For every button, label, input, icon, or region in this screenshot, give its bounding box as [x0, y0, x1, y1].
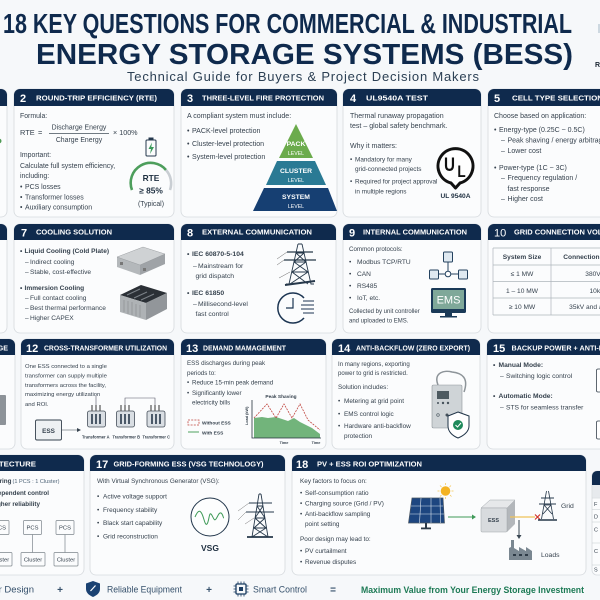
panel 5: cell type: [488, 89, 600, 217]
formula: Formula:: [20, 113, 47, 120]
text: important: •: [20, 194, 22, 202]
text: solution: Metering at grid point: [344, 398, 404, 405]
text: key factors: •: [300, 559, 302, 566]
panel 14: anti-backflow: [332, 339, 480, 449]
text: protocols: Modbus TCP/RTU: [357, 259, 411, 266]
text: key factors: •: [300, 500, 302, 508]
text: IEC standards: fast control: [196, 311, 229, 318]
pyramid: SYSTEM: [282, 194, 310, 201]
heading: ANTI-BACKFLOW (ZERO EXPORT): [356, 344, 471, 352]
text: cell types: Higher cost: [508, 196, 543, 203]
icon: UL mark: UL 9540A: [441, 193, 471, 200]
text: key factors: Self-consumption ratio: [305, 490, 369, 497]
text: capabilities: Grid reconstruction: [103, 534, 158, 540]
panel: table fragment: C: [594, 528, 598, 534]
footer banner: [0, 581, 585, 597]
footer: smart control: Smart Control: [253, 584, 307, 596]
text: cooling options: Best thermal performance: [30, 305, 106, 312]
text: modes: STS for seamless transfer: [506, 404, 584, 412]
text: description: •: [187, 380, 189, 386]
text: cell types: –: [501, 138, 505, 144]
text: solution: •: [338, 398, 340, 405]
text: description: periods to:: [187, 370, 216, 377]
heading: CROSS-TRANSFORMER UTILIZATION: [44, 344, 167, 352]
icon: battery: [146, 138, 156, 156]
text: cooling options: Liquid Cooling (Cold Plate): [24, 248, 109, 255]
text: cell types: Choose based on application:: [494, 113, 586, 120]
panel 3: fire protection: [181, 89, 337, 217]
icon: shield: [86, 581, 100, 597]
text: capabilities: Active voltage support: [103, 494, 167, 500]
arrow: PV to ESS: [448, 514, 476, 520]
panel 8: external communication: [181, 224, 336, 333]
formula: × 100%: [113, 128, 138, 137]
corner badge fragment: R: [595, 62, 600, 69]
diagram: ESS to transformers: [36, 396, 170, 440]
arrow: ESS to loads: [516, 520, 522, 539]
diagram fragment: switch boxes: [596, 369, 600, 439]
text: why it matters: Thermal runaway propagation: [350, 113, 444, 120]
panel 2: round-trip efficiency: 2: [20, 93, 26, 105]
icon: EMS monitor: EMS: [437, 294, 460, 306]
panel 4: UL9540A: [343, 89, 481, 217]
subtitle: Technical Guide for Buyers & Project Decision Makers: [127, 69, 480, 84]
text: modes: –: [500, 404, 504, 412]
text: solution: •: [338, 411, 340, 418]
diagram: ESS to transformers: Transformer B: [112, 434, 140, 440]
text: why it matters: in multiple regions: [355, 188, 407, 196]
label: loads: Loads: [541, 552, 560, 559]
text: cooling options: Stable, cost-effective: [30, 269, 91, 276]
text: solution: power to grid is restricted.: [338, 370, 408, 377]
text: cooling options: –: [25, 259, 29, 266]
text: requirements: A compliant system must include:: [187, 113, 291, 120]
chart: peak shaving: Peak Shaving: [265, 394, 297, 400]
text: requirements: [187, 113, 291, 161]
panel 18: PV + ESS ROI: [292, 455, 586, 575]
text: modes: Manual Mode:: [498, 362, 543, 369]
gauge: RTE at least 85%: ≥ 85%: [139, 186, 163, 196]
text: requirements: System-level protection: [192, 154, 265, 161]
text: key factors: Key factors to focus on:: [300, 478, 367, 485]
text: description: Reduce 15-min peak demand: [192, 380, 274, 386]
table: System Size: [503, 254, 542, 261]
panel 18: PV + ESS ROI: 18: [296, 459, 308, 471]
icon: ESS cabinet: [481, 500, 515, 532]
text: requirements: Cluster-level protection: [192, 141, 264, 148]
pyramid: LEVEL: [288, 204, 304, 210]
chart: peak shaving: Load (kW): [245, 406, 249, 425]
diagram: PCS to cluster: Cluster: [57, 558, 75, 564]
text: cooling options: Higher CAPEX: [30, 315, 74, 322]
text: description: ESS discharges during peak: [187, 360, 266, 367]
text: capabilities: •: [97, 534, 99, 540]
text: requirements: PACK-level protection: [192, 128, 260, 135]
panel: table fragment: [592, 471, 600, 575]
text: protocols: and uploaded to EMS.: [349, 318, 409, 324]
text: requirements: •: [187, 141, 189, 148]
legend: [188, 420, 232, 436]
formula: [20, 113, 138, 144]
panel 3: fire protection: 3: [187, 93, 193, 105]
text: important: PCS losses: [25, 184, 61, 191]
heading: COOLING SOLUTION: [36, 228, 112, 236]
icon: chip: [234, 582, 248, 596]
text: cell types: Power-type (1C ~ 3C): [499, 165, 567, 172]
icon: solar panel and sun: [408, 483, 454, 529]
plus: +: [206, 585, 212, 596]
panel 10: grid connection voltage: 10: [494, 228, 506, 240]
label: grid: Grid: [561, 503, 574, 510]
text: cell types: –: [501, 175, 505, 182]
text: key factors: Poor design may lead to:: [300, 536, 371, 543]
gauge: RTE at least 85%: RTE: [143, 173, 160, 183]
heading: PV + ESS ROI OPTIMIZATION: [317, 460, 422, 468]
text: capabilities: [97, 478, 220, 540]
text: modes: –: [500, 373, 504, 380]
text: key factors: •: [300, 511, 302, 518]
text: protocols: CAN: [357, 271, 371, 278]
text: string design: [0, 478, 60, 508]
panel 1 fragment: [0, 89, 7, 217]
heading: ROUND-TRIP EFFICIENCY (RTE): [36, 94, 158, 102]
footer: value statement: Maximum Value from Your Energy Storage Investment: [361, 585, 585, 596]
table: [493, 248, 600, 315]
text: cooling options: [20, 248, 109, 322]
text: solution: EMS control logic: [344, 411, 395, 418]
panel 13: demand management: [181, 339, 326, 449]
text: capabilities: Black start capability: [103, 520, 163, 527]
text: key factors: Anti-backflow sampling: [305, 511, 371, 518]
text: protocols: IoT, etc.: [357, 295, 380, 302]
text: important: including:: [20, 173, 49, 180]
text: cooling options: –: [25, 315, 29, 322]
text: solution: Solution includes:: [338, 384, 388, 391]
panel: table fragment: S: [594, 568, 598, 574]
text: why it matters: Why it matters:: [350, 143, 397, 150]
text: solution: In many regions, exporting: [338, 361, 410, 368]
text: cell types: Energy-type (0.25C ~ 0.5C): [499, 127, 585, 134]
panel 9: internal communication: 9: [349, 228, 355, 240]
icon: UL mark: U: [444, 153, 455, 175]
legend: With ESS: [202, 430, 224, 436]
icon: UL mark: L: [457, 163, 466, 181]
image: cold plate pack: [117, 247, 165, 275]
gauge: RTE at least 85%: (Typical): [138, 201, 164, 208]
text: protocols: •: [349, 271, 351, 278]
heading: GRID-FORMING ESS (VSG TECHNOLOGY): [114, 460, 264, 468]
chart: peak shaving: [245, 394, 321, 445]
panel 11 fragment: [0, 339, 15, 449]
footer: reliable equipment: Reliable Equipment: [107, 584, 182, 596]
text: description: One ESS connected to a single: [25, 364, 108, 370]
text: important: •: [20, 184, 22, 191]
text: solution: [338, 361, 411, 440]
image: immersion tank: [120, 285, 167, 320]
text: protocols: RS485: [357, 283, 377, 290]
text: why it matters: •: [350, 156, 352, 164]
text: description: maximizing energy utilization: [25, 392, 100, 398]
text: protocols: [349, 246, 420, 324]
legend: Without ESS: [202, 420, 232, 426]
heading: UL9540A TEST: [366, 94, 429, 102]
text: key factors: •: [300, 548, 302, 555]
text: cell types: •: [494, 127, 496, 134]
text: IEC standards: [187, 251, 248, 318]
text: capabilities: With Virtual Synchronous Generator (VSG):: [97, 478, 220, 485]
text: why it matters: [350, 113, 448, 196]
heading: DEMAND MAMAGEMENT: [203, 344, 287, 352]
text: requirements: •: [187, 128, 189, 135]
text: cooling options: Indirect cooling: [30, 259, 75, 266]
icon: VSG waveform: VSG: [201, 543, 219, 553]
diagram: ESS to transformers: Transformer C: [142, 434, 170, 440]
text: description: electricity bills: [192, 400, 230, 406]
panel 8: external communication: 8: [187, 228, 193, 240]
text: why it matters: Mandatory for many: [355, 156, 413, 164]
text: description: [25, 364, 108, 408]
text: IEC standards: Millisecond-level: [198, 301, 248, 308]
text: description: and ROI.: [25, 402, 49, 408]
text: protocols: Collected by unit controller: [349, 309, 420, 315]
panel 12: cross-transformer: [21, 339, 174, 449]
gauge: RTE at least 85%: [131, 163, 171, 208]
panel 7: cooling: [14, 224, 174, 333]
plus: +: [57, 585, 63, 596]
text: modes: Automatic Mode:: [498, 393, 553, 400]
text: IEC standards: –: [193, 301, 197, 308]
panel 17: grid-forming: [90, 455, 285, 575]
icon: grid tower: [538, 491, 557, 520]
text: protocols: Common protocols:: [349, 246, 403, 253]
title: ENERGY STORAGE SYSTEMS (BESS): [36, 39, 573, 71]
equals: =: [330, 585, 336, 596]
text: why it matters: •: [350, 178, 352, 186]
text: string design: (1 PCS : 1 Cluster): [12, 479, 60, 485]
icon: VSG waveform: [191, 498, 229, 553]
text: important: [20, 152, 115, 212]
text: modes: Switching logic control: [506, 373, 573, 380]
corner badge fragment: [595, 24, 600, 69]
text: capabilities: •: [97, 494, 99, 500]
text: modes: •: [493, 393, 495, 400]
icon: meter with shield: [432, 371, 469, 438]
panel 9: internal communication: [343, 224, 481, 333]
panel: table fragment: C: [594, 549, 598, 555]
heading: INTERNAL COMMUNICATION: [363, 228, 467, 236]
text: cell types: –: [501, 196, 505, 203]
pyramid: LEVEL: [288, 178, 304, 184]
text: important: Calculate full system efficiency,: [20, 163, 115, 170]
diagram: PCS to cluster: [0, 520, 78, 566]
text: modes: •: [493, 362, 495, 369]
diagram: ESS to transformers: Transformer A: [82, 434, 110, 440]
text: capabilities: •: [97, 520, 99, 527]
pyramid: CLUSTER: [280, 168, 312, 175]
panel 15: backup power: 15: [493, 343, 505, 355]
heading: EXTERNAL COMMUNICATION: [202, 228, 312, 236]
text: important: •: [20, 204, 22, 212]
text: cooling options: –: [25, 269, 29, 276]
text: why it matters: test – global safety benchmark.: [350, 123, 448, 130]
text: key factors: •: [300, 490, 302, 497]
text: cooling options: •: [20, 248, 22, 255]
diagram: PCS to cluster: PCS: [27, 526, 39, 532]
text: why it matters: Required for project approval: [355, 178, 437, 186]
pyramid: [253, 124, 337, 211]
text: IEC standards: IEC 61850: [192, 290, 224, 297]
text: cooling options: –: [25, 295, 29, 302]
panel 2: round-trip efficiency: [14, 89, 174, 217]
text: description: •: [187, 390, 189, 397]
text: solution: Hardware anti-backflow: [344, 423, 411, 430]
text: key factors: Charging source (Grid / PV): [305, 500, 384, 508]
heading: THREE-LEVEL FIRE PROTECTION: [202, 94, 324, 102]
title: [3, 8, 573, 71]
text: key factors: [300, 478, 384, 566]
text: why it matters: grid-connected projects: [355, 166, 421, 173]
text: protocols: •: [349, 259, 351, 266]
diagram: PCS to cluster: PCS: [59, 526, 71, 532]
formula: Discharge Energy: [52, 124, 107, 132]
text: requirements: •: [187, 154, 189, 161]
text: key factors: point setting: [305, 521, 340, 528]
icon: ESS cabinet: ESS: [488, 518, 499, 524]
text: important: Auxiliary consumption: [25, 204, 92, 212]
text: cooling options: •: [20, 285, 22, 292]
text: cooling options: Full contact cooling: [30, 295, 87, 302]
panel 12: cross-transformer: 12: [26, 343, 38, 355]
icon: fast clock: [278, 293, 314, 323]
text: IEC standards: Mainstream for: [198, 263, 244, 270]
table: ≤ 1 MW: [511, 271, 534, 278]
panel: table fragment: D: [594, 514, 598, 520]
text: description: Significantly lower: [192, 390, 242, 397]
text: cooling options: Immersion Cooling: [24, 285, 84, 292]
text: IEC standards: –: [193, 263, 197, 270]
text: cell types: Frequency regulation /: [508, 175, 577, 182]
panel 5: cell type: 5: [494, 93, 500, 105]
heading: CELL TYPE SELECTION: [512, 94, 600, 102]
table: 1 – 10 MW: [506, 288, 539, 295]
formula: Charge Energy: [56, 137, 103, 144]
text: cell types: Lower cost: [508, 148, 541, 155]
text: solution: •: [338, 423, 340, 430]
icon: factory: [509, 540, 532, 560]
panel 4: UL9540A: 4: [350, 93, 357, 105]
text: cell types: fast response: [508, 186, 550, 193]
pyramid: LEVEL: [288, 151, 304, 157]
text: key factors: Revenue disputes: [305, 559, 356, 566]
panel 6 fragment: [0, 224, 7, 333]
panel 17: grid-forming: 17: [96, 459, 108, 471]
panel 14: anti-backflow: 14: [338, 343, 351, 355]
text: protocols: •: [349, 295, 351, 302]
panel 7: cooling: 7: [21, 228, 27, 240]
icon: network nodes: [430, 252, 468, 279]
arrow: ESS to grid blocked: [510, 514, 540, 520]
text: important: Important:: [20, 152, 51, 159]
icon: transmission tower: [277, 244, 316, 285]
text: IEC standards: •: [187, 251, 189, 258]
text: cell types: –: [501, 148, 505, 155]
text: modes: [493, 362, 584, 412]
table: ≥ 10 MW: [509, 304, 536, 311]
diagram: ESS to transformers: ESS: [42, 428, 56, 435]
text: IEC standards: grid dispatch: [196, 273, 234, 280]
panel 16 fragment: architecture: [0, 455, 84, 575]
formula: =: [38, 128, 42, 137]
text: IEC standards: IEC 60870-5-104: [192, 251, 244, 258]
text: description: transformer can supply multiple: [25, 374, 108, 380]
icon: transmission tower: [238, 494, 274, 537]
text: description: transformers across the facility,: [25, 383, 106, 389]
text: IEC standards: •: [187, 290, 189, 297]
formula: RTE: [20, 128, 35, 137]
text: important: Transformer losses: [25, 194, 84, 202]
pyramid: PACK: [287, 141, 305, 148]
panel 15: backup power: [487, 339, 600, 449]
chart: peak shaving: Time: [312, 441, 320, 445]
chart: peak shaving: Time: [280, 441, 288, 445]
text: protocols: •: [349, 283, 351, 290]
text: description: [187, 360, 274, 406]
panel: table fragment: F: [594, 502, 598, 508]
text: cell types: •: [494, 165, 496, 172]
text: cooling options: –: [25, 305, 29, 312]
text: cell types: [494, 113, 600, 203]
text: capabilities: •: [97, 507, 99, 514]
panel 13: demand management: 13: [186, 343, 198, 355]
diagram: PCS to cluster: Cluster: [24, 558, 42, 564]
text: capabilities: Frequency stability: [103, 507, 158, 514]
panel 10: grid connection voltage: [488, 224, 600, 333]
icon: UL mark: [438, 149, 473, 200]
text: key factors: PV curtailment: [305, 548, 347, 555]
text: solution: protection: [344, 433, 373, 440]
